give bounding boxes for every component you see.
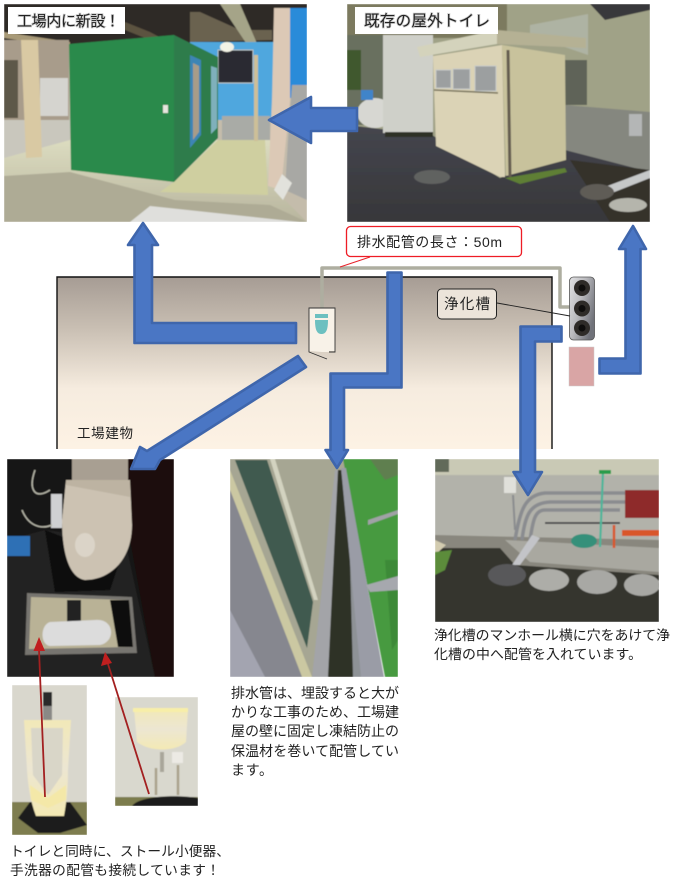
text: septic tank note: 浄化槽のマンホール横に穴をあけて浄 [434, 627, 670, 643]
septic tank [570, 277, 594, 340]
callout: pipe length [340, 226, 522, 267]
text: drain pipe note: 保温材を巻いて配管してい [231, 743, 399, 759]
caption: new toilet: 工場内に新設！ [17, 13, 120, 30]
arrow: drain route to wall photo [326, 272, 402, 468]
old toilet location [569, 347, 594, 386]
photo: drain pipe along wall [230, 459, 398, 677]
photo: existing outdoor toilet [347, 4, 650, 222]
label: septic tank: 浄化槽 [444, 296, 490, 313]
text: drain pipe note: ます。 [231, 762, 273, 778]
factory building plan [57, 277, 552, 449]
text: drain pipe note: 排水管は、埋設すると大が [231, 685, 399, 701]
photo: new toilet inside factory [4, 4, 307, 222]
text: drain pipe note: 屋の壁に固定し凍結防止の [231, 723, 399, 739]
photo: toilet and floor hatch [7, 459, 174, 677]
text: septic tank note: 化槽の中へ配管を入れています。 [434, 646, 642, 662]
arrow: basin pipe connection [101, 652, 149, 794]
caption: existing toilet: 既存の屋外トイレ [364, 12, 490, 30]
text: drain pipe note: かりな工事のため、工場建 [231, 704, 399, 720]
arrow: toilet room to toilet photo [131, 356, 306, 469]
label: septic tank [438, 289, 570, 319]
arrow: urinal pipe connection [34, 637, 45, 797]
photo: pipes into septic tank manholes [435, 459, 660, 622]
arrow: toilet location to new toilet photo [128, 223, 296, 343]
drain pipe [322, 268, 572, 308]
photo: urinal [12, 685, 87, 835]
callout: pipe length: 排水配管の長さ：50m [357, 234, 502, 250]
arrow: outside position to existing toilet photo [600, 226, 646, 374]
caption: existing toilet [355, 7, 498, 34]
arrow: old toilet to new toilet [269, 97, 357, 143]
photo: hand basin [115, 697, 198, 806]
label: factory building: 工場建物 [77, 426, 133, 441]
text: urinal and basin note: 手洗器の配管も接続しています！ [10, 862, 220, 878]
caption: new toilet [8, 7, 125, 34]
arrow: septic tank to manhole photo [514, 326, 562, 495]
icon: toilet room [309, 308, 335, 359]
text: urinal and basin note: トイレと同時に、ストール小便器、 [10, 844, 230, 859]
